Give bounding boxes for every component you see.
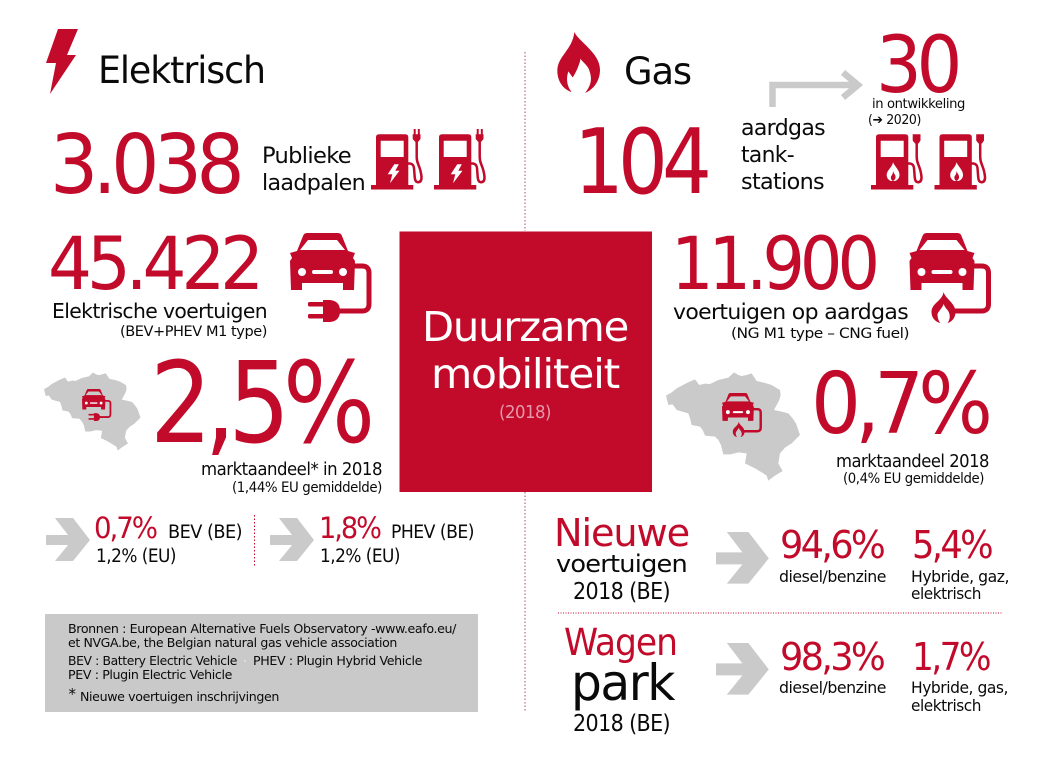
label: in ontwikkeling: in ontwikkeling — [872, 97, 965, 112]
title: Duurzame mobiliteit: mobiliteit — [431, 350, 620, 398]
label: aardgas tankstations: aardgas — [741, 116, 825, 141]
map: Belgium gas — [666, 372, 800, 481]
icon: lightning bolt — [46, 29, 78, 94]
text: abbreviations — [68, 653, 423, 682]
sublabel: BEV+PHEV: (BEV+PHEV M1 type) — [120, 324, 267, 340]
label: Publieke laadpalen: Publieke — [262, 144, 351, 169]
value: 1,7%: 1,7% — [912, 635, 991, 679]
label: Elektrische voertuigen: Elektrische voertuigen — [52, 299, 267, 323]
label: aardgas tankstations — [741, 116, 825, 195]
text: abbreviations: PHEV : Plugin Hybrid Vehicle — [253, 653, 423, 668]
arrow: to 30 — [772, 72, 858, 107]
center divider top — [524, 52, 526, 231]
text: abbreviations: PEV : Plugin Electric Vehicle — [68, 667, 233, 682]
number: 104: 104 — [574, 110, 708, 215]
sublabel: NG M1: (NG M1 type – CNG fuel) — [731, 326, 909, 342]
number: 30: 30 — [876, 21, 958, 111]
heading: Wagenpark — [564, 621, 677, 737]
panel: gas heading — [557, 32, 691, 93]
panel: nieuwe voertuigen — [554, 511, 1009, 605]
heading: Nieuwe voertuigen: Nieuwe — [554, 511, 689, 555]
icon: gas car — [910, 233, 988, 323]
label: aardgas tankstations: stations — [741, 170, 824, 195]
label: diesel/benzine: diesel/benzine — [779, 678, 886, 697]
icon: arrow — [46, 518, 90, 561]
label: diesel/benzine: diesel/benzine — [779, 567, 886, 586]
icon: gas pump 1 — [871, 134, 922, 190]
label: marktaandeel: marktaandeel* in 2018 — [201, 460, 382, 480]
text: footnote: * — [68, 685, 76, 703]
icon: arrow — [716, 532, 769, 584]
number: 3.038: 3.038 — [50, 118, 240, 213]
heading: Nieuwe voertuigen: voertuigen — [556, 550, 687, 578]
panel: BEV share — [46, 511, 242, 567]
title: Duurzame mobiliteit: Duurzame — [422, 303, 628, 351]
icon: electric car — [290, 233, 369, 322]
label: 2020: (➔ 2020) — [868, 113, 921, 128]
text: sources: et NVGA.be, the Belgian natural gas vehicle association — [68, 635, 397, 650]
value: EU: 1,2% (EU) — [320, 546, 400, 567]
text: sources — [68, 621, 457, 650]
number: 45.422: 45.422 — [48, 222, 259, 307]
heading: Nieuwe voertuigen: 2018 (BE) — [573, 579, 670, 605]
panel: electric vehicles — [48, 222, 369, 340]
heading: Elektrisch: Elektrisch — [98, 49, 265, 92]
sublabel: EU average: (0,4% EU gemiddelde) — [843, 471, 984, 487]
map: Belgium electric — [44, 372, 140, 450]
panel: public charging stations — [50, 118, 485, 213]
label: PHEV (BE): PHEV (BE) — [391, 522, 474, 543]
panel: elektrisch heading — [46, 29, 265, 94]
panel: gas market share — [666, 355, 989, 487]
value: 1,8%: 1,8% — [319, 511, 381, 545]
panel: electric market share — [44, 339, 382, 496]
heading: Wagenpark: 2018 (BE) — [573, 711, 670, 737]
panel: center box — [400, 232, 652, 492]
panel: sources — [45, 614, 478, 712]
icon: gas pump 2 — [934, 134, 985, 190]
panel: wagenpark — [564, 621, 1008, 737]
text: footnote: Nieuwe voertuigen inschrijvingen — [80, 689, 279, 704]
panel: gas vehicles — [671, 222, 988, 342]
icon: flame — [557, 32, 600, 93]
value: 5,4%: 5,4% — [912, 523, 993, 567]
icon: charging station 1 — [371, 129, 422, 190]
icon: arrow — [270, 518, 314, 561]
box — [400, 232, 652, 492]
value: 98,3%: 98,3% — [780, 635, 885, 679]
label: hybride: elektrisch — [911, 696, 981, 715]
label: hybride — [911, 678, 1008, 715]
text: abbreviations: BEV : Battery Electric Vehicle — [68, 653, 238, 668]
heading: Nieuwe voertuigen — [554, 511, 689, 605]
heading: Wagenpark: park — [571, 654, 676, 712]
label: hybride: elektrisch — [911, 584, 981, 603]
value: 94,6%: 94,6% — [780, 523, 885, 567]
sublabel: EU average: (1,44% EU gemiddelde) — [232, 480, 382, 496]
label: hybride: Hybride, gas, — [911, 678, 1008, 697]
heading: Wagenpark: Wagen — [564, 621, 677, 664]
number: 11.900: 11.900 — [671, 222, 876, 307]
value: 0,7%: 0,7% — [94, 511, 157, 545]
panel: PHEV share — [270, 511, 474, 567]
number: 0,7%: 0,7% — [811, 355, 989, 454]
background — [45, 614, 478, 712]
icon: charging station 2 — [434, 129, 485, 190]
label: BEV (BE): BEV (BE) — [168, 522, 242, 543]
center divider bottom — [524, 492, 526, 712]
text: sources: Bronnen : European Alternative Fuels Observatory -www.eafo.eu/ — [68, 621, 457, 636]
value: EU: 1,2% (EU) — [96, 546, 176, 567]
label: voertuigen op aardgas: voertuigen op aardgas — [673, 300, 908, 325]
label: marktaandeel 2018: marktaandeel 2018 — [836, 452, 989, 472]
label: Publieke laadpalen — [262, 144, 365, 196]
panel: gas stations — [574, 21, 985, 215]
heading: Gas: Gas — [624, 50, 691, 93]
icon: arrow — [716, 643, 769, 695]
title: Duurzame mobiliteit — [422, 303, 628, 398]
year: (2018) — [499, 402, 551, 423]
label: Publieke laadpalen: laadpalen — [262, 171, 365, 196]
label: hybride: Hybride, gaz, — [911, 567, 1009, 586]
number: 2,5%: 2,5% — [150, 339, 371, 469]
label: aardgas tankstations: tank- — [741, 143, 794, 168]
label: hybride — [911, 567, 1009, 603]
